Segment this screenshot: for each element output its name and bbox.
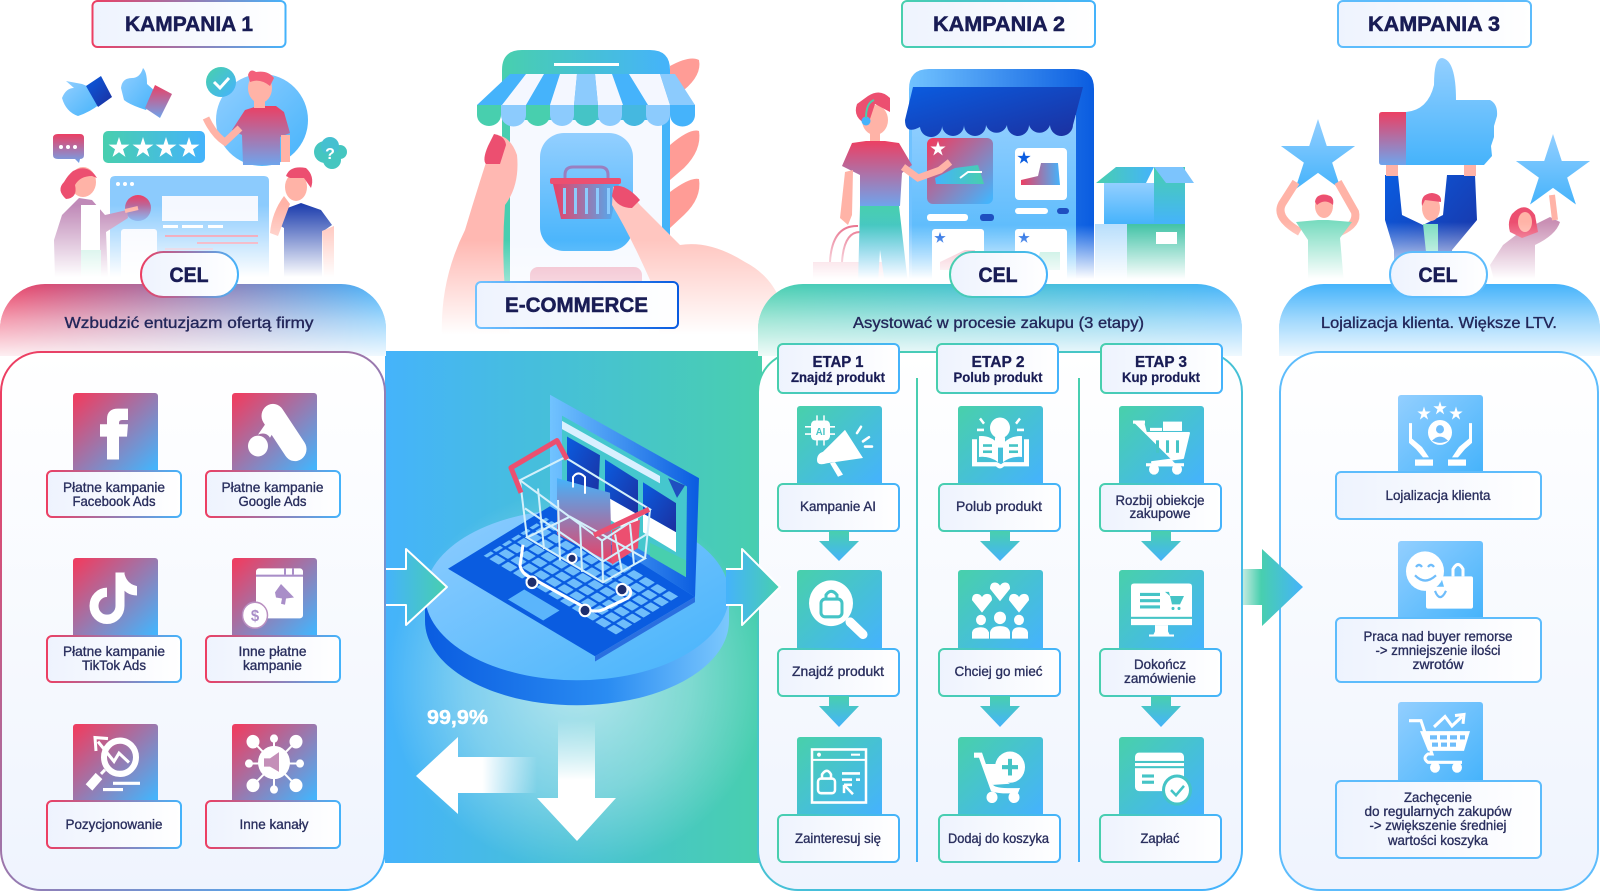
- shop phone: [905, 69, 1094, 284]
- step: Znajdź produkt: Znajdź produkt: [792, 663, 884, 679]
- cardboard boxes: [1095, 167, 1194, 284]
- title: Kampania 1: KAMPANIA 1: [125, 13, 253, 36]
- icon: big thumb up: [1379, 58, 1497, 165]
- step: Chciej go mieć: Chciej go mieć: [954, 663, 1042, 679]
- 3D disc with laptop and cart: [425, 395, 729, 705]
- cart wheels: [526, 554, 628, 616]
- title: E-commerce: E-COMMERCE: [505, 294, 648, 317]
- pink fingers: [670, 58, 699, 228]
- woman presenting: [54, 167, 138, 284]
- app tile with basket: [540, 133, 633, 251]
- man in suit: [1385, 165, 1477, 284]
- loyalty: regular purchases: [1336, 702, 1541, 858]
- CEL pill 2: [950, 252, 1047, 297]
- arrow: left white: [416, 737, 537, 814]
- loyalty: buyer remorse: [1336, 541, 1541, 682]
- step: Zainteresuj się: [778, 737, 899, 862]
- step: Zainteresuj się: Zainteresuj się: [795, 830, 881, 846]
- arrow: down white: [537, 719, 616, 841]
- stage header 1: [778, 344, 899, 393]
- left hand: [442, 134, 518, 335]
- step: Rozbij obiekcje: Rozbij obiekcje: [1116, 492, 1205, 508]
- man with star: [1280, 182, 1355, 284]
- title: E-commerce: [476, 282, 678, 328]
- channel: Google Ads: Google Ads: [238, 493, 306, 509]
- goal text 3: Lojalizacja klienta. Większe LTV.: [1321, 315, 1557, 332]
- channel: Google Ads: [206, 393, 340, 517]
- fade: [1270, 222, 1560, 285]
- stage header 1: Znajdź produkt: [791, 370, 885, 385]
- star rating bar: [103, 131, 205, 163]
- stage header 3: ETAP 3: [1135, 354, 1187, 371]
- step: Rozbij obiekcje: zakupowe: [1130, 505, 1191, 521]
- storefront awning: [477, 74, 695, 126]
- loyalty: buyer remorse: Praca nad buyer remorse: [1364, 628, 1513, 644]
- fade: [800, 225, 1200, 285]
- step: Zapłać: [1100, 737, 1221, 862]
- step: Dokończ zamówienie: [1100, 570, 1221, 696]
- woman with star: [1490, 195, 1560, 284]
- arrow: to campaign 3: [1243, 549, 1303, 626]
- channel: SEO: [47, 724, 181, 848]
- laptop base: [448, 506, 695, 661]
- channel: other channels: Inne kanały: [240, 816, 308, 832]
- title: Kampania 2: KAMPANIA 2: [933, 13, 1065, 36]
- center background panel: [385, 351, 762, 863]
- channel: other paid campaigns: Inne płatne: [238, 643, 307, 659]
- channel: other paid campaigns: $: [251, 608, 260, 625]
- percentage label: 99,9%: [427, 707, 488, 729]
- illustration: campaign 3 loyalty: [1270, 58, 1590, 285]
- step: Kampanie AI: [778, 406, 899, 531]
- channel: other paid campaigns: [206, 558, 340, 682]
- channel: other channels: [206, 724, 340, 848]
- panel: campaign 3 loyalty: [1280, 352, 1598, 890]
- stage header 2: Polub produkt: [954, 370, 1043, 385]
- step: Zapłać: Zapłać: [1140, 830, 1180, 846]
- phone body: [502, 50, 670, 310]
- stage header 2: ETAP 2: [972, 354, 1024, 371]
- loyalty: regular purchases: wartości koszyka: [1387, 832, 1488, 848]
- stage header 3: Kup produkt: [1122, 370, 1200, 385]
- right hand: [612, 186, 780, 335]
- icon: question cloud: ?: [325, 146, 335, 163]
- arrow: into center: [386, 549, 447, 625]
- cart handles: [511, 441, 649, 535]
- man thinking: [270, 167, 334, 284]
- loyalty: regular purchases: -> zwiększenie średniej: [1370, 817, 1506, 833]
- step: Chciej go mieć: [939, 570, 1060, 696]
- illustration: mobile storefront: [430, 50, 800, 345]
- panel: campaign 2 steps: [758, 352, 1242, 890]
- illustration: campaign 1 people and reviews: [50, 67, 347, 289]
- goal text 2: Asystować w procesie zakupu (3 etapy): [853, 315, 1144, 332]
- arrow: out of center: [726, 549, 780, 625]
- arrows row 2: [819, 696, 1181, 727]
- step: Polub produkt: Polub produkt: [956, 498, 1042, 514]
- fade: [50, 205, 340, 285]
- loyalty: regular purchases: do regularnych zakupów: [1364, 803, 1512, 819]
- icon: person circle: [206, 71, 308, 166]
- channel: TikTok Ads: Płatne kampanie: [63, 643, 165, 659]
- step: Dodaj do koszyka: Dodaj do koszyka: [948, 830, 1049, 846]
- loyalty: buyer remorse: -> zmniejszenie ilości: [1376, 642, 1500, 658]
- step: Kampanie AI: AI: [816, 427, 826, 438]
- title: Kampania 3: KAMPANIA 3: [1368, 13, 1500, 36]
- loyalty: buyer remorse: zwrotów: [1412, 656, 1464, 672]
- awning: [905, 87, 1083, 137]
- step: Dokończ zamówienie: Dokończ: [1134, 656, 1186, 672]
- title: Kampania 2: [902, 1, 1095, 47]
- title: Kampania 1: [92, 1, 286, 47]
- header band: campaign 2: [758, 284, 1242, 356]
- stage header 3: [1101, 344, 1222, 393]
- woman with headphones: [840, 92, 950, 284]
- illustration: campaign 2 shop: [800, 69, 1200, 285]
- icon: right star: [1516, 134, 1590, 205]
- channel: Google Ads: Płatne kampanie: [222, 479, 324, 495]
- channel: Facebook Ads: [47, 393, 181, 517]
- goal text 1: Wzbudzić entuzjazm ofertą firmy: [64, 315, 314, 332]
- step: Polub produkt: [939, 406, 1060, 531]
- header band: campaign 3: [1279, 284, 1600, 356]
- CEL pill 1: [141, 252, 238, 297]
- CEL pill 3: CEL: [1418, 264, 1458, 287]
- CEL pill 1: CEL: [170, 264, 209, 287]
- header band: campaign 1: [0, 284, 386, 356]
- loyalty: regular purchases: Zachęcenie: [1404, 789, 1472, 805]
- step: Kampanie AI: Kampanie AI: [800, 498, 876, 514]
- stage header 2: [937, 344, 1058, 393]
- arrows row 1: [819, 531, 1181, 561]
- step: Dodaj do koszyka: [939, 737, 1060, 862]
- channel: Facebook Ads: Płatne kampanie: [63, 479, 165, 495]
- icon: left star: [1281, 119, 1355, 190]
- channel: Facebook Ads: Facebook Ads: [72, 493, 156, 509]
- step: Rozbij obiekcje: [1100, 406, 1221, 531]
- laptop screen: [550, 395, 699, 597]
- icon: thumb up: [121, 68, 172, 118]
- title: Kampania 3: [1338, 1, 1531, 47]
- loyalty: Lojalizacja klienta: Lojalizacja klienta: [1386, 487, 1491, 503]
- stage header 1: ETAP 1: [812, 354, 864, 371]
- channel: TikTok Ads: TikTok Ads: [82, 657, 146, 673]
- fade: [430, 240, 800, 345]
- channel: TikTok Ads: [47, 558, 181, 682]
- CEL pill 3: [1390, 252, 1487, 297]
- icon: question cloud: [314, 137, 347, 169]
- shopping bag: [813, 226, 888, 284]
- icon: chat bubble: [53, 134, 84, 163]
- channel: other paid campaigns: kampanie: [243, 657, 302, 673]
- cart wire frame: [520, 457, 650, 611]
- step: Znajdź produkt: [778, 570, 899, 696]
- icon: check bubble: [206, 67, 236, 97]
- CEL pill 2: CEL: [978, 264, 1018, 287]
- channel: SEO: Pozycjonowanie: [66, 816, 163, 832]
- browser window: [110, 176, 269, 289]
- disc: [425, 509, 729, 705]
- loyalty: Lojalizacja klienta: [1336, 395, 1541, 519]
- panel: campaign 1 channels: [1, 352, 385, 890]
- icon: thumb down: [62, 76, 112, 116]
- step: Dokończ zamówienie: zamówienie: [1124, 670, 1196, 686]
- shopping bag: [557, 473, 640, 565]
